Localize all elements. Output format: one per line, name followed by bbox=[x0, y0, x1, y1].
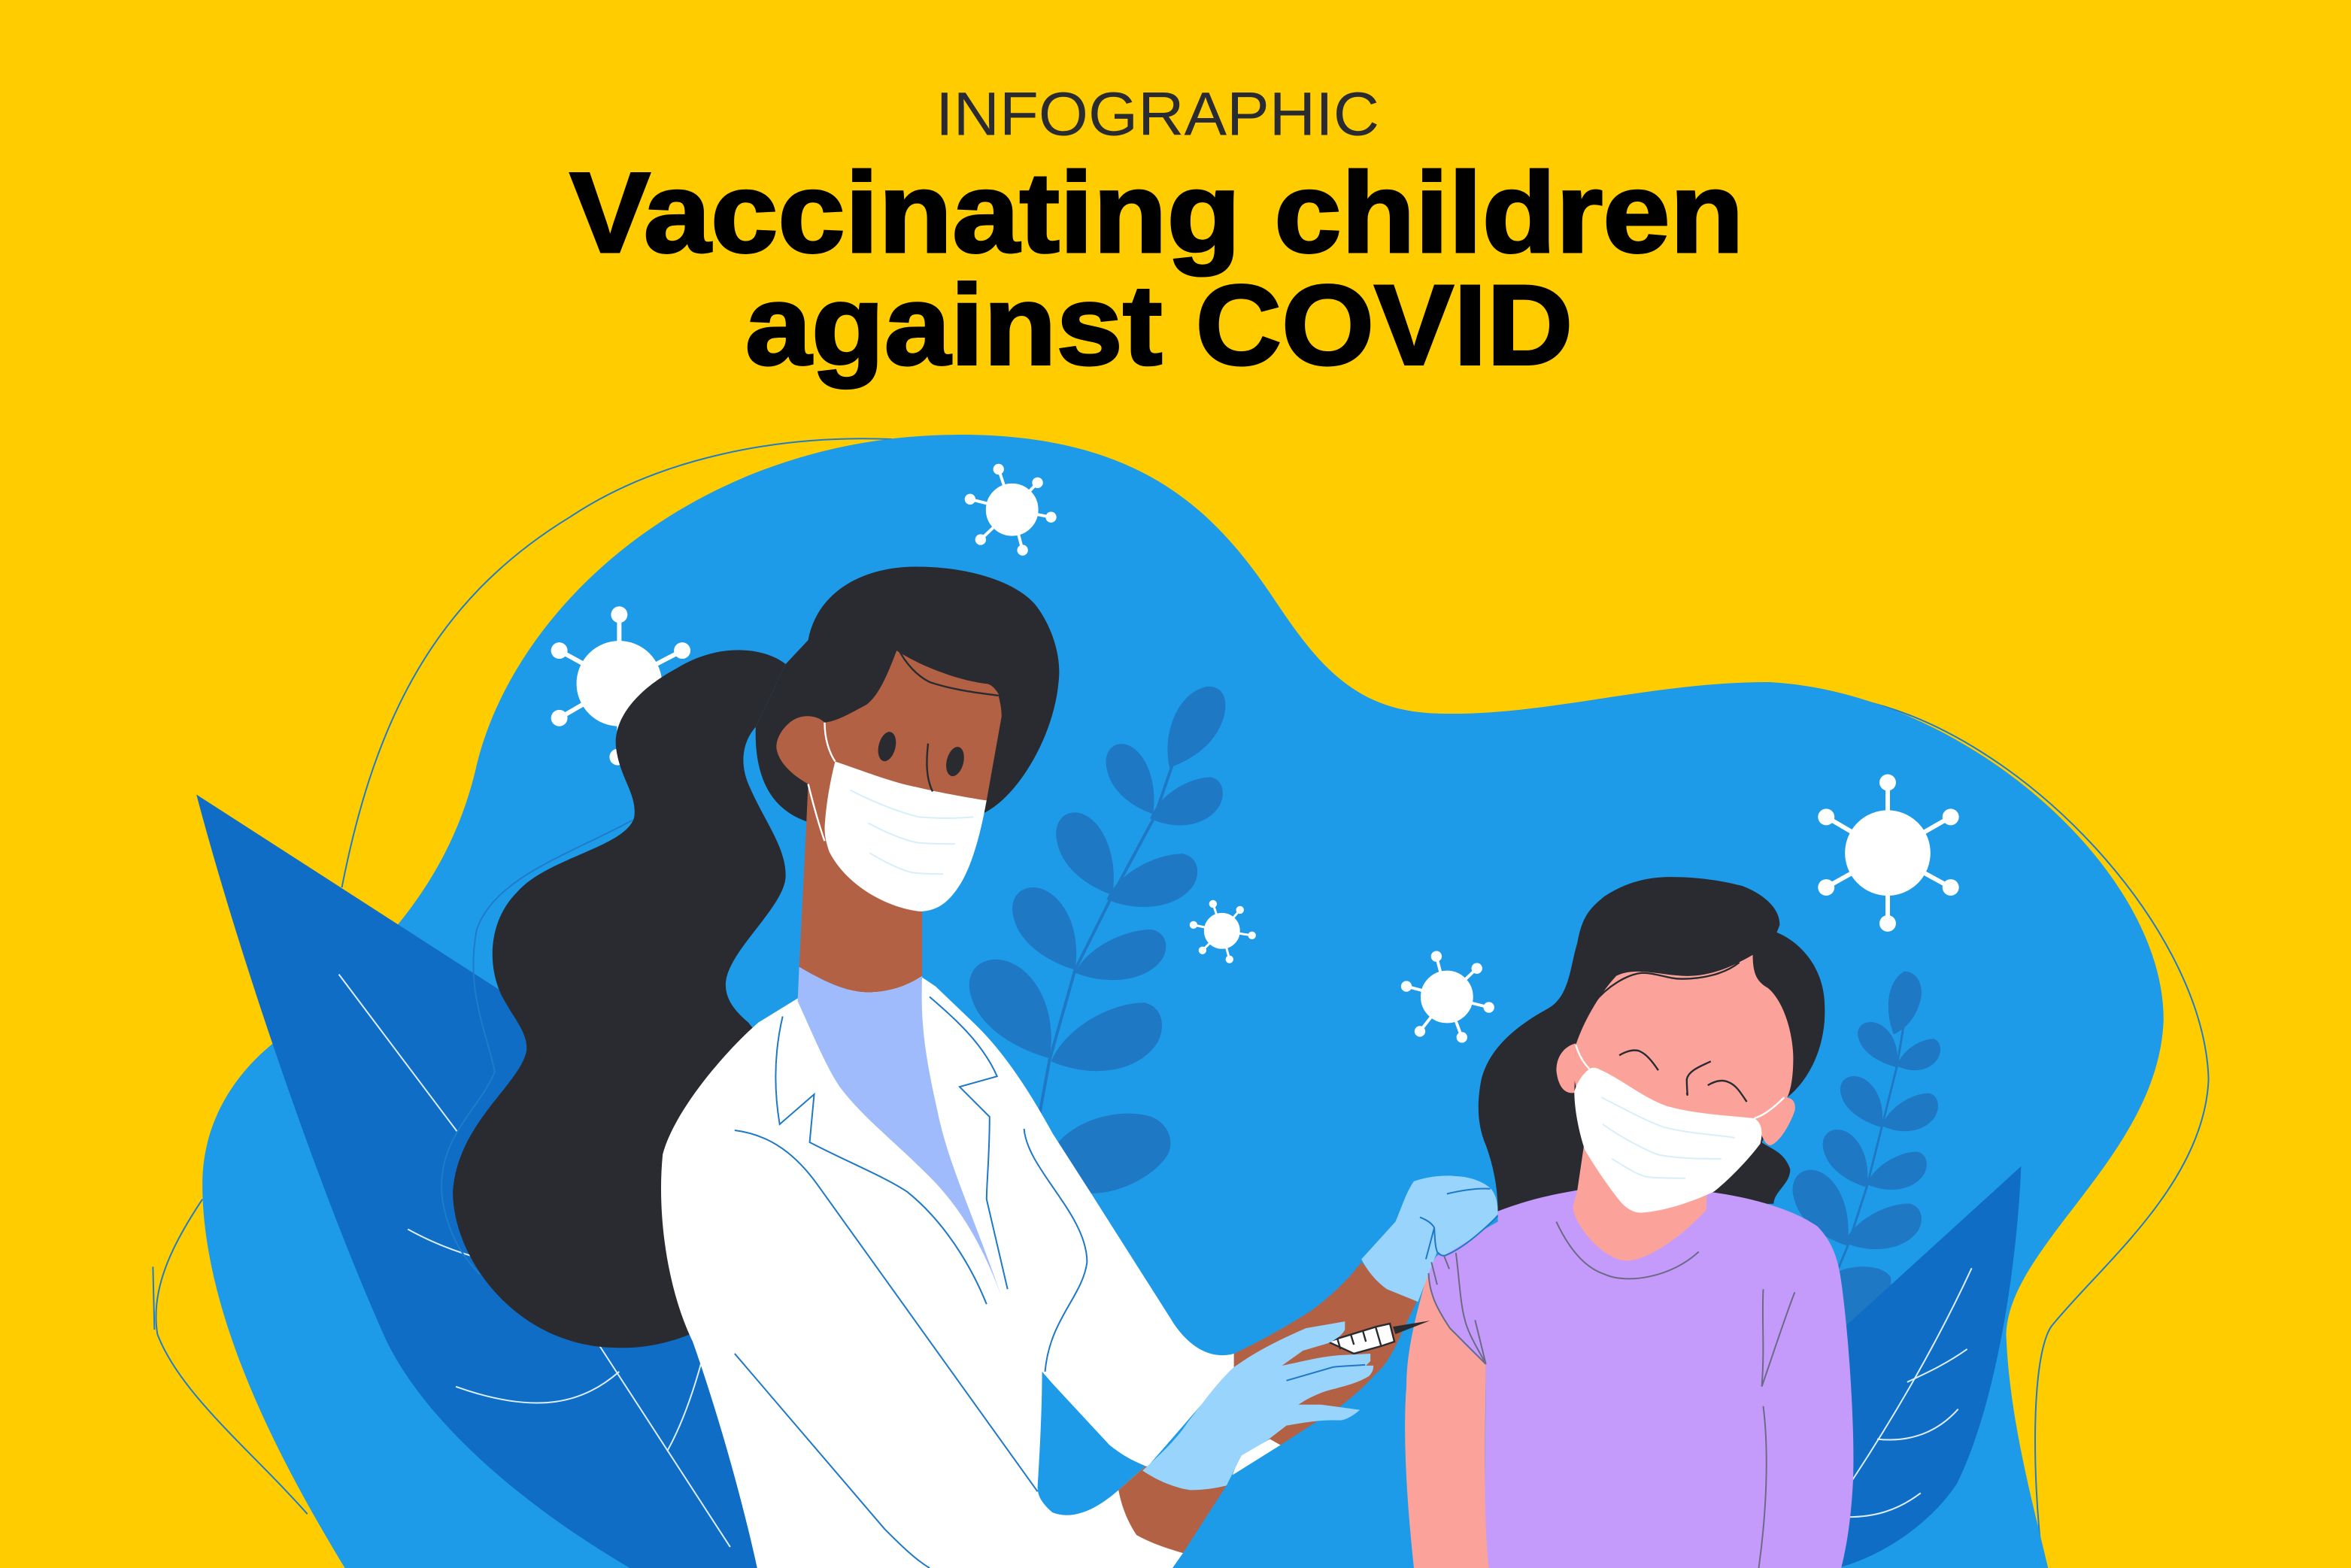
girl bbox=[1405, 877, 1853, 1568]
left leaf veins bbox=[339, 975, 730, 1547]
girl hair bbox=[1479, 877, 1825, 1212]
nurse ear bbox=[776, 716, 827, 784]
blue blob backdrop bbox=[202, 435, 2164, 1568]
gap between arm and body bbox=[1038, 1372, 1145, 1515]
icon: virus by girl bbox=[1401, 951, 1494, 1043]
hand glove with syringe bbox=[1142, 1321, 1373, 1490]
nurse ponytail bbox=[453, 650, 839, 1348]
syringe bbox=[1328, 1321, 1430, 1354]
girl sweater bbox=[1424, 1190, 1853, 1568]
nurse collar bbox=[798, 967, 1002, 1297]
white cuff bbox=[1233, 1439, 1281, 1475]
nurse eyes bbox=[875, 730, 967, 778]
title line 1: Vaccinating children bbox=[570, 150, 1744, 277]
girl sleeve folds bbox=[1429, 1222, 1794, 1568]
nurse bbox=[441, 566, 1794, 1568]
right leaf veins bbox=[1847, 1268, 1972, 1517]
girl arm bbox=[1405, 1274, 1489, 1568]
girl left ear bbox=[1556, 1043, 1576, 1093]
thin background outlines bbox=[153, 438, 2209, 1559]
title line 2: against COVID bbox=[745, 262, 1573, 389]
large left leaf bbox=[196, 794, 810, 1568]
nurse forearm bbox=[1234, 1262, 1417, 1445]
small right leaf bbox=[1837, 1166, 2021, 1568]
kicker: INFOGRAPHIC bbox=[936, 80, 1379, 148]
girl face bbox=[1574, 955, 1793, 1162]
header bbox=[570, 80, 1744, 389]
icon: virus top centre bbox=[965, 464, 1057, 556]
nurse mask bbox=[808, 723, 987, 911]
girl right ear bbox=[1756, 1097, 1795, 1145]
icon: virus left bbox=[551, 606, 690, 766]
nurse head hair bbox=[756, 566, 1059, 839]
coat lines bbox=[735, 997, 1087, 1568]
nurse face lines bbox=[898, 648, 999, 791]
upper glove on shoulder bbox=[1361, 1175, 1498, 1302]
girl neck bbox=[1573, 1139, 1708, 1260]
nurse lower arm bbox=[1118, 1466, 1227, 1553]
girl face lines bbox=[1594, 963, 1747, 1102]
plant beside nurse bbox=[969, 687, 1225, 1193]
hair outline strand bbox=[441, 820, 632, 1274]
girl mask bbox=[1574, 1045, 1784, 1213]
plant beside girl bbox=[1793, 972, 1940, 1325]
icon: virus right large bbox=[1818, 775, 1959, 932]
icon: virus small centre bbox=[1190, 900, 1256, 963]
nurse neck and face bbox=[799, 651, 1002, 993]
nurse coat bbox=[661, 978, 1234, 1568]
